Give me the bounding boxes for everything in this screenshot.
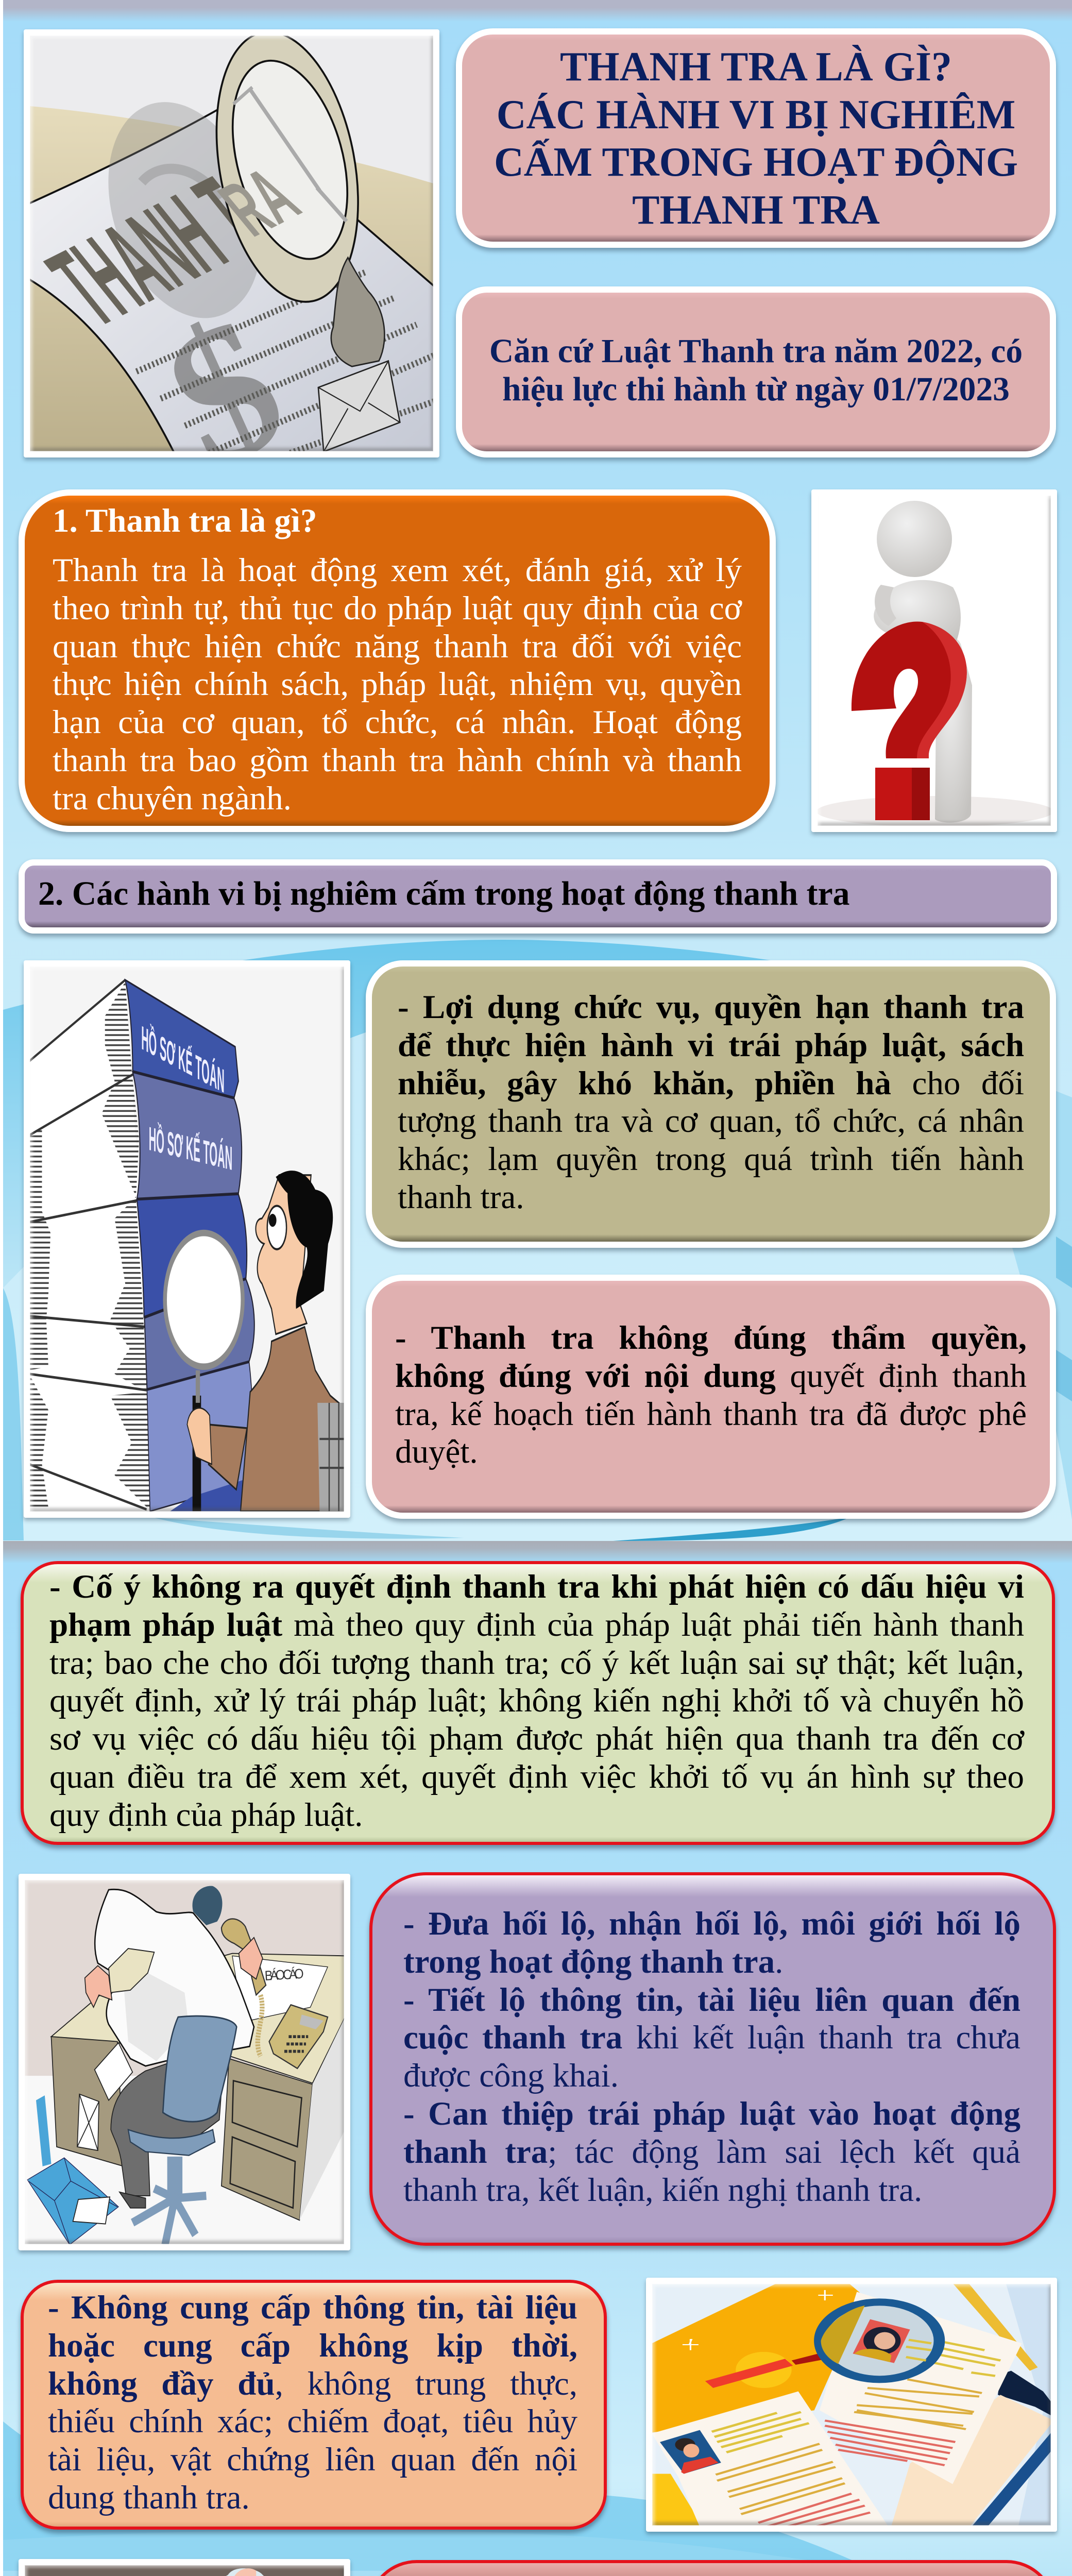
text: abuse of position: tượng thanh tra và cơ quan, tổ chức, cá nhân [398, 1103, 1024, 1140]
text: abuse of position: thanh tra. [398, 1179, 524, 1216]
subtitle text: Căn cứ Luật Thanh tra năm 2022, có [489, 333, 1023, 370]
text: wrong authority: duyệt. [395, 1433, 478, 1470]
text: abuse of position: - Lợi dụng chức vụ, quyền hạn thanh tra [398, 989, 1024, 1026]
subtitle text [489, 333, 1023, 408]
text: withholding information: - Không cung cấp thông tin, tài liệu [48, 2289, 577, 2326]
title heading: CẤM TRONG HOẠT ĐỘNG [494, 140, 1018, 185]
panel: withholding information [21, 2280, 607, 2530]
image: man inspecting stacked accounting files: HỒ SƠ KẾ TOÁN [149, 1120, 232, 1177]
title heading: CÁC HÀNH VI BỊ NGHIÊM [497, 92, 1015, 137]
image: magnifier over inspection paper: THANH T [26, 155, 283, 349]
image: magnifier over inspection paper [24, 29, 439, 457]
title heading: THANH TRA [632, 188, 880, 233]
image: magnifier over inspection paper: RA [202, 152, 316, 252]
image: man inspecting stacked accounting files [24, 960, 350, 1518]
subtitle panel [456, 286, 1056, 457]
section 2 heading bar [19, 859, 1057, 934]
text: withholding information: không đầy đủ, không trung thực, [48, 2365, 577, 2402]
image: official hiding envelopes at desk: BÁO CÁO [264, 1965, 304, 1984]
panel: bribery and leaks [369, 1872, 1056, 2246]
image: documents under magnifier [646, 2278, 1057, 2532]
text: intentionally no decision: phạm pháp luật mà theo quy định của pháp luật phải tiến hành thanh [49, 1606, 1024, 1643]
text: withholding information: hoặc cung cấp không kịp thời, [48, 2327, 577, 2364]
section 1 body text [53, 552, 742, 817]
section 1 body text: hạn của cơ quan, tổ chức, cá nhân. Hoạt động [53, 704, 742, 741]
panel: section 1 definition [19, 489, 776, 832]
text: intentionally no decision: - Cố ý không ra quyết định thanh tra khi phát hiện có dấu hiệu vi [49, 1568, 1024, 1605]
section 1 body text: quan thực hiện chức năng thanh tra đối với việc [53, 628, 742, 665]
panel: wrong authority [366, 1275, 1056, 1519]
text: wrong authority: - Thanh tra không đúng thẩm quyền, [395, 1319, 1027, 1357]
text: bribery and leaks: thanh tra; tác động làm sai lệch kết quả [403, 2133, 1020, 2171]
text: wrong authority: tra, kế hoạch tiến hành thanh tra đã được phê [395, 1396, 1027, 1433]
section 1 body text: Thanh tra là hoạt động xem xét, đánh giá, xử lý [53, 552, 742, 589]
section 1 body text: thanh tra bao gồm thanh tra hành chính và thanh [53, 742, 742, 779]
section 1 body text: theo trình tự, thủ tục do pháp luật quy định của cơ [53, 590, 742, 627]
section 2 heading bar: 2. Các hành vi bị nghiêm cấm trong hoạt động thanh tra [38, 875, 850, 912]
section 1 body text: thực hiện chính sách, pháp luật, nhiệm vụ, quyền [53, 666, 742, 703]
text: withholding information: tài liệu, vật chứng liên quan đến nội [48, 2441, 577, 2478]
text: bribery and leaks [403, 1905, 1020, 2209]
panel: abuse of position [366, 960, 1056, 1248]
text: abuse of position: để thực hiện hành vi trái pháp luật, sách [398, 1027, 1024, 1064]
text: wrong authority: không đúng với nội dung quyết định thanh [395, 1358, 1027, 1395]
text: abuse of position [398, 989, 1024, 1216]
image: man inspecting stacked accounting files: HỒ SƠ KẾ TOÁN [141, 1019, 225, 1101]
text: intentionally no decision: tra; bao che cho đối tượng thanh tra; cố ý kết luận sai sự thật; kết luận, [49, 1645, 1024, 1682]
text: bribery and leaks: thanh tra, kết luận, kiến nghị thanh tra. [403, 2172, 922, 2209]
text: intentionally no decision: quyết định, xử lý trái pháp luật; không kiến nghị khởi tố và chuyển hồ [49, 1682, 1024, 1719]
text: bribery and leaks: cuộc thanh tra khi kết luận thanh tra chưa [403, 2019, 1020, 2056]
text: intentionally no decision: sơ vụ việc có dấu hiệu tội phạm được phát hiện qua thanh tra đến cơ [49, 1720, 1024, 1757]
panel: obstruction and retaliation [367, 2560, 1056, 2576]
text: bribery and leaks: - Đưa hối lộ, nhận hối lộ, môi giới hối lộ [403, 1905, 1020, 1942]
text: abuse of position: nhiễu, gây khó khăn, phiền hà cho đối [398, 1065, 1024, 1102]
text: bribery and leaks: - Can thiệp trái pháp luật vào hoạt động [403, 2095, 1020, 2132]
text: bribery and leaks: trong hoạt động thanh tra. [403, 1943, 783, 1980]
text: intentionally no decision: quan điều tra để xem xét, quyết định việc khởi tố vụ án hình sự theo [49, 1758, 1024, 1795]
text: abuse of position: khác; lạm quyền trong quá trình tiến hành [398, 1141, 1024, 1178]
text: bribery and leaks: - Tiết lộ thông tin, tài liệu liên quan đến [403, 1981, 1020, 2019]
subtitle text: hiệu lực thi hành từ ngày 01/7/2023 [502, 371, 1010, 408]
panel: intentionally no decision [21, 1561, 1055, 1845]
text: intentionally no decision [49, 1568, 1025, 1834]
image: official hiding envelopes at desk [19, 1874, 350, 2250]
text: withholding information: dung thanh tra. [48, 2479, 250, 2516]
text: bribery and leaks: được công khai. [403, 2057, 619, 2094]
title heading [494, 44, 1018, 233]
image: worried man thinking of threats [19, 2559, 350, 2576]
text: withholding information: thiếu chính xác; chiếm đoạt, tiêu hủy [48, 2403, 577, 2440]
text: intentionally no decision: quy định của pháp luật. [49, 1797, 363, 1834]
section 1 heading: 1. Thanh tra là gì? [53, 502, 317, 539]
title panel [456, 28, 1056, 248]
text: wrong authority [395, 1319, 1027, 1470]
title heading: THANH TRA LÀ GÌ? [560, 44, 952, 90]
section 1 body text: tra chuyên ngành. [53, 780, 292, 817]
image: thinking figure with question mark [811, 489, 1057, 832]
text: withholding information [48, 2289, 577, 2516]
